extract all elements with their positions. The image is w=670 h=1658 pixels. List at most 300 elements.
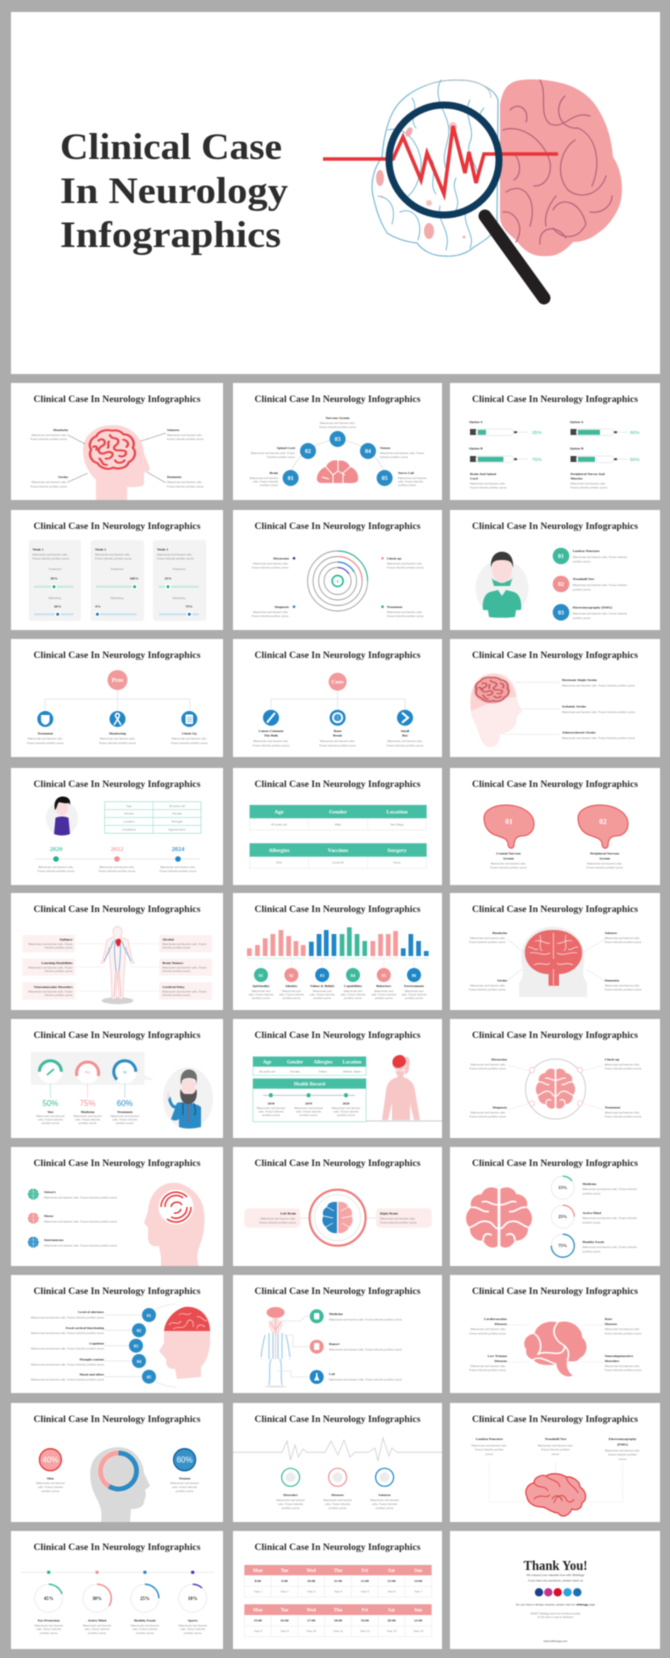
timeline: Maecenas sed laoreet odio.: [99, 865, 135, 869]
item: sensory: Maecenas sed laoreet odio. Fusce lobortis porttitor purus: [44, 1195, 118, 1199]
node: pros: [108, 670, 128, 690]
leader lines: [502, 682, 560, 734]
heading: Clinical Case In Neurology Infographics: [472, 905, 638, 915]
label: ischemic: Maecenas sed laoreet odio. Fusce lobortis porttitor purus: [562, 710, 636, 714]
icon: brain outline: [526, 1474, 586, 1516]
label: check-up: Fusce lobortis porttitor purus: [387, 566, 424, 570]
table: history: Pink: [276, 861, 282, 865]
shape: central nervous system: 01: [505, 817, 513, 826]
label: low trauma: Low Trauma: [488, 1354, 507, 1358]
slide 14: bar chart: [233, 893, 442, 1010]
table: schedule 2: Year 14: [413, 1629, 424, 1633]
label: discussion: Maecenas sed laoreet odio.: [470, 1062, 506, 1066]
label: check-up: [381, 556, 424, 570]
text: peripheral nerves: Fusce lobortis porttitor purus: [570, 486, 608, 490]
label: rare: Maecenas sed laoreet odio.: [605, 1327, 640, 1331]
label: nerve cell: [398, 471, 427, 487]
gauge: sports: 10%: [188, 1597, 198, 1602]
item: sensory: Sensory: [44, 1190, 56, 1194]
label: rare: [605, 1317, 642, 1335]
label: treadmill: [538, 1437, 573, 1456]
label: nervous system: [319, 416, 356, 429]
bar labels: porttitor purus: [344, 996, 362, 1000]
numbered nodes: 01: [288, 476, 294, 482]
node: pros: Pros: [112, 678, 124, 684]
credit: for this slide or copy for attribution: [538, 1616, 574, 1619]
hero title: [60, 126, 288, 255]
bar labels: odio. Fusce lobortis: [310, 992, 335, 996]
table: schedule 1: 14:00: [414, 1579, 423, 1583]
timeline: Maecenas sed laoreet odio.: [38, 865, 74, 869]
heading: Clinical Case In Neurology Infographics: [34, 780, 201, 790]
label: bone break: Break: [333, 734, 342, 738]
gauge: 15%: Maecenas sed laoreet odio. Fusce lobortis: [582, 1187, 637, 1191]
illustration: woman silhouette: [366, 1055, 442, 1121]
gauge: 15%: [551, 1176, 637, 1199]
item: motor: Motor: [44, 1214, 54, 1218]
stat: men: Men: [47, 1476, 54, 1480]
label: rare: Fusce lobortis porttitor purus: [605, 1331, 642, 1335]
bar labels: Maecenas sed: [282, 989, 301, 993]
label: headache: Fusce lobortis porttitor purus: [469, 940, 506, 944]
label: monitoring: Maecenas sed laoreet odio.: [100, 736, 135, 740]
table: history: Surgery: [387, 848, 407, 854]
gauge: 25%: porttitor purus: [582, 1220, 601, 1224]
table: patient details: Portugal: [172, 820, 183, 824]
bar labels: odio. Fusce lobortis: [401, 992, 427, 996]
label: alcohol: Alcohol: [162, 938, 174, 942]
table: patient: Allergies: [314, 1061, 332, 1066]
label: low trauma: Maecenas sed laoreet odio.: [470, 1364, 506, 1368]
table: schedule 2: Year 12: [360, 1629, 370, 1633]
heading: Clinical Case In Neurology Infographics: [472, 1287, 638, 1297]
label: treatment: Fusce lobortis porttitor purus: [605, 1114, 642, 1118]
text: brain and spinal cord: Fusce lobortis porttitor purus: [470, 486, 507, 490]
gauge: treatment: [113, 1060, 137, 1098]
label: causes: Fusce lobortis porttitor purus: [253, 744, 290, 748]
label: cerebral palsy: lobortis porttitor purus: [162, 993, 191, 997]
table: schedule 1: Year 1: [254, 1590, 262, 1594]
nodes: 04: [137, 1359, 142, 1364]
label: brain tumors: Maecenas sed laoreet odio. Fusce: [162, 966, 207, 970]
heading: Clinical Case In Neurology Infographics: [472, 1031, 638, 1041]
gauge: eye protection: odio. Fusce lobortis: [36, 1627, 62, 1631]
illustration: split brain ring: [310, 1190, 366, 1246]
label: small bus: Small: [401, 729, 409, 733]
table: history: [250, 843, 427, 868]
message: [527, 1573, 585, 1582]
box: left brain: Maecenas sed laoreet odio.: [260, 1216, 296, 1220]
slide 13: body with conditions: [11, 893, 223, 1010]
label: diagnosis: [252, 605, 295, 618]
illustration: head with donut: [90, 1447, 150, 1522]
slide 8: cons tree: [233, 639, 442, 757]
bar labels: odio. Fusce lobortis: [248, 992, 274, 996]
item: report: [310, 1340, 403, 1354]
connector lines: [68, 433, 166, 483]
message: We respect your valuable time with SlideEgg!: [527, 1573, 585, 1577]
text: brain and spinal cord: [470, 472, 507, 490]
label: emg: Fusce lobortis porttitor: [608, 1453, 637, 1457]
shape: peripheral nervous system: [578, 805, 628, 848]
table: schedule 2: Year 9: [280, 1629, 289, 1633]
slide 1: head with four conditions: [11, 383, 223, 500]
item 03: porttitor purus: [573, 616, 591, 620]
label: peripheral: [586, 852, 624, 870]
thank you heading: Thank You!: [524, 1558, 588, 1573]
label: peripheral: Maecenas sed laoreet odio.: [587, 862, 623, 866]
label: cranial: Fusce lobortis porttitor purus: [490, 866, 527, 870]
stat: men: Maecenas sed laoreet: [36, 1481, 65, 1485]
item: medicine: [310, 1309, 403, 1323]
gauge: medicine: Rx: [85, 1070, 90, 1074]
gauge: 75%: [551, 1234, 637, 1257]
gauge: 15%: porttitor purus: [582, 1192, 601, 1196]
label: nerve cell: Maecenas sed laoreet: [398, 476, 427, 480]
label: neuromuscular disorders: Maecenas sed laoreet odio. Fusce: [28, 990, 73, 994]
table: schedule 1: Year 7: [414, 1590, 423, 1594]
label: thought: Maecenas sed laoreet odio. Fusce lobortis porttitor purus: [31, 1362, 105, 1366]
label: emg: Electromyography: [609, 1437, 637, 1441]
label: treadmill: purus: [552, 1452, 560, 1456]
table: schedule 1: 9:00: [281, 1579, 288, 1583]
table: patient details: Age: [126, 804, 132, 808]
table: patient details: Hypertension: [168, 828, 186, 832]
heading: Clinical Case In Neurology Infographics: [254, 1415, 421, 1425]
label: dementia: Dementia: [605, 978, 619, 982]
label: seizures: Seizures: [167, 428, 180, 432]
percent: 75: 75%: [80, 1099, 96, 1108]
circle: diseases: Diseases: [331, 1493, 344, 1497]
health record panel: Maecenas sed laoreet: [294, 1106, 323, 1110]
label: focal: Maecenas sed laoreet odio. Fusce lobortis porttitor purus: [31, 1331, 105, 1335]
card: week 3: Maecenas sed laoreet odio.: [157, 552, 193, 556]
circle: diseases: Maecenas sed laoreet: [323, 1498, 352, 1502]
percent: 75: porttitor purus: [79, 1121, 97, 1125]
label: seizures: Maecenas sed laoreet odio.: [167, 433, 203, 437]
slide 9: stroke types: [450, 639, 660, 757]
text: peripheral nerves: Peripheral Nerves And: [570, 472, 605, 476]
label: mood: Maecenas sed laoreet odio. Fusce lobortis porttitor purus: [31, 1378, 105, 1382]
item: interneurons: [28, 1237, 118, 1248]
stat: women: odio. Fusce lobortis: [172, 1485, 198, 1489]
card: week 2: Treatment: [110, 567, 124, 571]
label: discussion: Discussion: [273, 556, 289, 560]
table: schedule 1: Thu: [334, 1569, 343, 1574]
numbered nodes: 02: [289, 973, 294, 978]
table: patient details: Location: [124, 820, 135, 824]
gauge: test: [38, 1060, 62, 1098]
label: spinal cord: Maecenas sed laoreet odio. Fusce: [251, 451, 295, 455]
heading: Clinical Case In Neurology Infographics: [34, 1159, 201, 1169]
table: patient details: Female: [172, 812, 182, 816]
bar labels: Environment: [404, 984, 425, 988]
label: neuromuscular disorders: lobortis porttitor purus: [45, 993, 73, 997]
text: brain and spinal cord: Cord: [470, 476, 478, 480]
gauge: active mind: Active Mind: [88, 1618, 106, 1622]
item 03: 03: [558, 610, 564, 616]
percent: 50: Maecenas sed laoreet: [36, 1114, 65, 1118]
gauge: active mind: 30%: [92, 1597, 102, 1602]
timeline: Maecenas sed laoreet odio.: [160, 865, 196, 869]
bar chart: [247, 927, 429, 968]
illustration: doctor: [476, 552, 528, 618]
gauge: healthy foods: 25%: [140, 1597, 150, 1602]
label: cardiovascular: [469, 1317, 508, 1335]
label: cardiovascular: Maecenas sed laoreet odio.: [470, 1327, 506, 1331]
slide 19: neuron types with head: [11, 1147, 223, 1266]
slide 6: doctor and tests: [450, 510, 660, 630]
label: stroke: Fusce lobortis porttitor purus: [469, 988, 506, 992]
label: seizures: Fusce lobortis porttitor purus: [605, 940, 642, 944]
numbered nodes: 01: [259, 973, 263, 978]
label: cognition: [31, 1341, 105, 1351]
label: brain: Maecenas sed laoreet: [250, 476, 278, 480]
syringe: option B 50%: [570, 446, 640, 463]
label: neurodegenerative: Fusce lobortis porttitor purus: [605, 1368, 642, 1372]
box: right brain: Right Brain: [380, 1212, 398, 1216]
chart: radial rings: [308, 551, 368, 611]
label: epilepsy: Epilepsy: [60, 938, 73, 942]
label: bone break: Fusce lobortis porttitor purus: [319, 744, 356, 748]
illustration: nervous system: [261, 1307, 290, 1388]
label: cognition: Cognition: [89, 1341, 104, 1345]
syringe: option A 60%: 60%: [630, 430, 640, 436]
label: check up: Check Up: [182, 732, 197, 736]
table: schedule 1: 10:00: [307, 1579, 316, 1583]
arc connector: [291, 439, 385, 473]
gauge: eye protection: Maecenas sed laoreet: [34, 1624, 63, 1628]
icon: head and brain: [83, 425, 150, 500]
circle: disorders: [276, 1468, 305, 1510]
label: ischemic: Ischemic Stroke: [562, 704, 586, 708]
heading: Clinical Case In Neurology Infographics: [254, 522, 421, 532]
label: cranial: Cranial Nervous: [496, 852, 522, 856]
slide 21: brain with gauges: [450, 1147, 660, 1266]
icon: monitoring: [110, 711, 126, 727]
percent: 75: Maecenas sed laoreet: [73, 1114, 102, 1118]
heading: Clinical Case In Neurology Infographics: [254, 1031, 421, 1041]
label: lumbar: Maecenas sed laoreet odio.: [472, 1443, 507, 1447]
brain right hemisphere: [500, 79, 622, 256]
syringe: option A 60%: Option A: [570, 420, 584, 424]
gauge: sports: Maecenas sed laoreet: [178, 1624, 207, 1628]
gauge: active mind: porttitor purus: [88, 1631, 106, 1635]
label: seizures: Fusce lobortis porttitor purus: [167, 437, 204, 441]
card: week 2: 0%: [95, 604, 101, 608]
slide 7: pros tree: [11, 639, 223, 757]
table: history: Vaccines: [328, 848, 349, 854]
syringe: option A 25%: 25%: [532, 430, 542, 436]
label: neurodegenerative: Neurodegenerative: [605, 1354, 633, 1358]
circle: seizures: Maecenas sed laoreet: [370, 1498, 399, 1502]
gauge: sports: Sports: [188, 1618, 198, 1622]
box: right brain: Maecenas sed laoreet odio.: [380, 1216, 416, 1220]
label: dementia: Fusce lobortis porttitor purus: [167, 484, 204, 488]
icon: brain dome: [317, 460, 358, 483]
label: treatment: Treatment: [387, 605, 403, 609]
label: learning disabilities: [28, 961, 73, 973]
timeline: [21, 1571, 214, 1574]
percent: 50: Test: [47, 1110, 54, 1114]
bar labels: porttitor purus: [252, 996, 270, 1000]
table: history: None: [394, 861, 401, 865]
numbered nodes: 05: [382, 973, 387, 978]
label: ischemic: [562, 704, 636, 714]
connectors: [104, 1304, 176, 1387]
card: week 3: Fusce lobortis porttitor purus: [157, 556, 194, 560]
label: nerve cell: odio. Fusce lobortis: [398, 480, 424, 484]
label: brain tumors: Brain Tumors: [162, 961, 184, 965]
label: seizures: [167, 428, 204, 441]
card: week 2: 100%: [130, 576, 139, 580]
website: www.slideegg.com: [544, 1639, 568, 1643]
label: headache: Maecenas sed laoreet odio.: [470, 936, 506, 940]
item 02: [553, 576, 627, 592]
percent: 60: odio. Fusce lobortis: [112, 1118, 138, 1122]
label: causes: [253, 729, 290, 748]
label: emg: [605, 1437, 641, 1461]
gauge: treatment: %: [123, 1070, 127, 1074]
label: dementia: Dementia: [167, 475, 182, 479]
table: schedule 1: Sat: [388, 1569, 395, 1574]
health record panel: odio. Fusce lobortis: [333, 1110, 359, 1114]
label: diagnosis: Maecenas sed laoreet odio.: [470, 1110, 506, 1114]
label: treatment: Fusce lobortis porttitor purus: [27, 741, 64, 745]
numbered nodes: 04: [365, 449, 371, 455]
card: week 2: Week 2: [95, 548, 106, 552]
label: brain tumors: [162, 961, 207, 973]
heading: Clinical Case In Neurology Infographics: [472, 780, 638, 790]
numbered nodes: 02: [305, 449, 311, 455]
item: lab: [310, 1370, 403, 1384]
health record panel: odio. Fusce lobortis: [258, 1110, 284, 1114]
bar labels: odio. Fusce lobortis: [340, 992, 366, 996]
circle: diseases: [323, 1468, 352, 1510]
nodes: 05: [147, 1374, 152, 1380]
percent: 60: Maecenas sed laoreet: [111, 1114, 139, 1118]
icon: pen: [263, 710, 279, 726]
gauge: 75%: Maecenas sed laoreet odio. Fusce lobortis: [582, 1245, 637, 1249]
label: dementia: [167, 475, 204, 488]
health record panel: Health Record: [294, 1083, 325, 1088]
label: rare: Diseases: [605, 1322, 618, 1326]
timeline: 2024: [172, 846, 185, 853]
left and right boxes: [23, 935, 212, 1000]
box: left brain: Fusce lobortis porttitor purus: [259, 1220, 297, 1224]
message: If you have any questions, please reach us: [528, 1578, 583, 1582]
label: causes: Causes Cutenate: [258, 729, 284, 733]
hero title: Clinical Case: [60, 126, 282, 167]
card: week 1: Week 1: [32, 548, 44, 552]
tree connector: [45, 689, 190, 710]
gauge: healthy foods: [131, 1584, 159, 1635]
card: week 3: 75%: [186, 604, 193, 608]
table: patient details: Gender: [124, 812, 134, 816]
label: headache: Fusce lobortis porttitor purus: [30, 437, 68, 441]
illustration: head with brain: [470, 673, 522, 747]
icon: arrow: [397, 710, 413, 726]
label: alcohol: Maecenas sed laoreet odio. Fusce: [162, 942, 207, 946]
design request: Do you have a design request, please visit our slideegg page: [516, 1602, 595, 1606]
table: schedule 1: Year 4: [334, 1590, 343, 1594]
illustration: woman patient: [46, 796, 78, 836]
gauge: sports: [178, 1584, 207, 1635]
slide 11: patient tables: [233, 768, 442, 885]
tree connector: [271, 691, 405, 709]
label: discussion: [469, 1058, 507, 1070]
percent: 50: porttitor purus: [41, 1121, 60, 1125]
item 03: Maecenas sed laoreet odio. Fusce lobortis: [573, 612, 627, 616]
card: week 3: Week 3: [157, 548, 168, 552]
label: neurodegenerative: [605, 1354, 642, 1372]
label: monitoring: Fusce lobortis porttitor purus: [99, 741, 136, 745]
health record panel: 2020: [342, 1102, 350, 1106]
syringe: option B 75%: Option B: [469, 446, 483, 450]
callout background: [31, 1052, 154, 1085]
stat: men: [36, 1449, 65, 1493]
percent: 50: odio. Fusce lobortis: [38, 1118, 63, 1122]
box: left brain: Left Brain: [280, 1212, 296, 1216]
heading: Clinical Case In Neurology Infographics: [34, 1543, 201, 1553]
label: check-up: Check-up: [387, 556, 401, 560]
gauge: 25%: Active Mind: [582, 1211, 601, 1215]
slide 16: gauges and doctor: [11, 1019, 223, 1138]
item: medicine: Medicine: [329, 1312, 343, 1316]
label: nature: lobortis porttitor purus: [380, 455, 409, 459]
slide 30: thank you: [450, 1531, 660, 1649]
table: patient: Pollen: [319, 1069, 327, 1073]
gauge: eye protection: 45%: [44, 1597, 54, 1602]
heading: Clinical Case In Neurology Infographics: [472, 651, 638, 661]
circle: diseases: odio. Fusce lobortis: [325, 1502, 351, 1506]
label: low trauma: Fusce lobortis porttitor purus: [469, 1368, 507, 1372]
bar labels: porttitor purus: [375, 996, 393, 1000]
label: treatment: [27, 732, 64, 745]
label: nature: Maecenas sed laoreet odio. Fusce: [380, 451, 425, 455]
label: check-up: Maecenas sed laoreet odio.: [387, 562, 423, 566]
item 02: Treadmill Test: [573, 577, 595, 581]
syringe: option B 75%: [469, 446, 542, 463]
card: week 1: Marketing: [48, 596, 62, 600]
table: patient: Age: [263, 1061, 272, 1066]
table: schedule 2: 16:00: [280, 1619, 289, 1623]
label: alertness: Maecenas sed laoreet odio. Fusce lobortis porttitor purus: [31, 1315, 105, 1319]
connectors: [300, 1217, 376, 1219]
percent: 50: 50%: [42, 1099, 58, 1108]
item 02: Maecenas sed laoreet odio. Fusce lobortis: [573, 583, 627, 587]
label: nerve cell: Nerve Cell: [398, 471, 414, 475]
illustration: male doctor: [163, 1067, 213, 1129]
label: check-up: Maecenas sed laoreet odio.: [605, 1062, 640, 1066]
label: brain: Brain: [269, 471, 278, 475]
text: brain and spinal cord: Brain And Spinal: [470, 472, 496, 476]
label: stroke: Fusce lobortis porttitor purus: [30, 484, 68, 488]
label: epilepsy: [28, 938, 73, 950]
label: treatment: Treatment: [605, 1106, 621, 1110]
label: spinal cord: Spinal Cord: [277, 446, 295, 450]
label: check-up: Fusce lobortis porttitor purus: [605, 1066, 642, 1070]
label: brain: [250, 471, 279, 487]
label: causes: The Bulk: [264, 734, 278, 738]
illustration: head with brain: [159, 1307, 210, 1379]
label: neuromuscular disorders: Neuromuscular Disorders: [34, 985, 73, 989]
gauge: healthy foods: Maecenas sed laoreet: [131, 1624, 159, 1628]
gauge: 75%: Healthy Foods: [582, 1240, 605, 1244]
label: diagnosis: Diagnosis: [493, 1106, 508, 1110]
label: dementia: Maecenas sed laoreet odio.: [605, 984, 640, 988]
gauge: eye protection: porttitor purus: [40, 1631, 58, 1635]
